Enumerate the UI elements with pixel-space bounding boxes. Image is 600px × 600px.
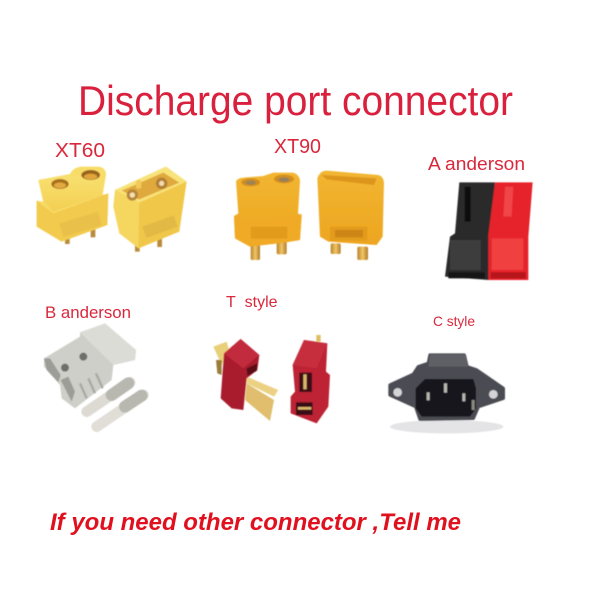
icon: T style connectors (213, 335, 330, 423)
label: B anderson: B anderson (45, 303, 131, 322)
icon: A anderson connector (445, 182, 533, 280)
icon: B anderson connector and terminals (44, 323, 143, 427)
icon: XT60 connectors (37, 167, 187, 252)
panel: XT60 (37, 140, 187, 252)
title: Discharge port connector (78, 77, 513, 124)
icon: XT90 connectors (234, 171, 384, 260)
label: A anderson: A anderson (428, 154, 525, 174)
icon: C style socket (390, 354, 503, 433)
panel: T style (213, 294, 330, 423)
panel: A anderson (428, 154, 533, 280)
panel: XT90 (234, 136, 384, 260)
panel: B anderson (44, 303, 143, 427)
callout: other connector note: If you need other connector ,Tell me (50, 509, 461, 536)
label: C style: C style (433, 313, 475, 329)
panel: C style (390, 313, 503, 433)
label: XT90: XT90 (274, 136, 321, 158)
label: XT60: XT60 (55, 140, 105, 162)
label: T style: T style (226, 294, 278, 311)
